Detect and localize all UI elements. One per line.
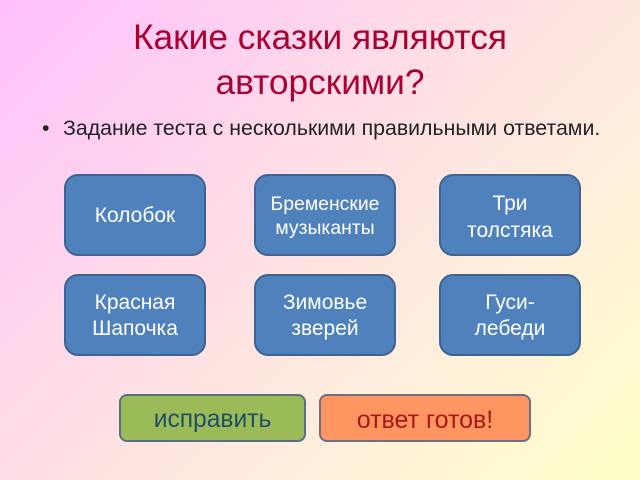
title	[133, 18, 507, 102]
answer button: Гуси-лебеди: лебеди	[475, 317, 545, 340]
answer button: Зимовье зверей: Зимовье	[283, 291, 367, 314]
answer button: Три толстяка	[439, 174, 581, 256]
answer button: Колобок: Колобок	[95, 204, 175, 227]
subtitle bullet text: •	[42, 116, 49, 140]
answer button: Бременские музыканты: музыканты	[275, 217, 375, 239]
answer button: Гуси-лебеди	[439, 274, 581, 356]
answer button: Три толстяка: Три	[492, 192, 528, 215]
answer button: Красная Шапочка: Шапочка	[92, 317, 178, 340]
answer button: Зимовье зверей: зверей	[291, 317, 359, 340]
button: ответ готов!: ответ готов!	[357, 406, 493, 434]
subtitle bullet text: Задание теста с несколькими правильными ответами.	[63, 116, 600, 140]
title: авторскими?	[215, 63, 425, 102]
answer button: Гуси-лебеди: Гуси-	[485, 291, 535, 314]
button: исправить: исправить	[154, 406, 271, 433]
button: ответ готов!	[319, 394, 531, 442]
title: Какие сказки являются	[133, 18, 507, 57]
answer button: Колобок	[64, 174, 206, 256]
answer button: Бременские музыканты: Бременские	[271, 193, 379, 215]
answer button: Красная Шапочка	[64, 274, 206, 356]
answer button: Бременские музыканты	[254, 174, 396, 256]
answer button: Три толстяка: толстяка	[467, 219, 553, 242]
answer button: Зимовье зверей	[254, 274, 396, 356]
button: исправить	[119, 394, 306, 442]
answer button: Красная Шапочка: Красная	[95, 291, 175, 314]
